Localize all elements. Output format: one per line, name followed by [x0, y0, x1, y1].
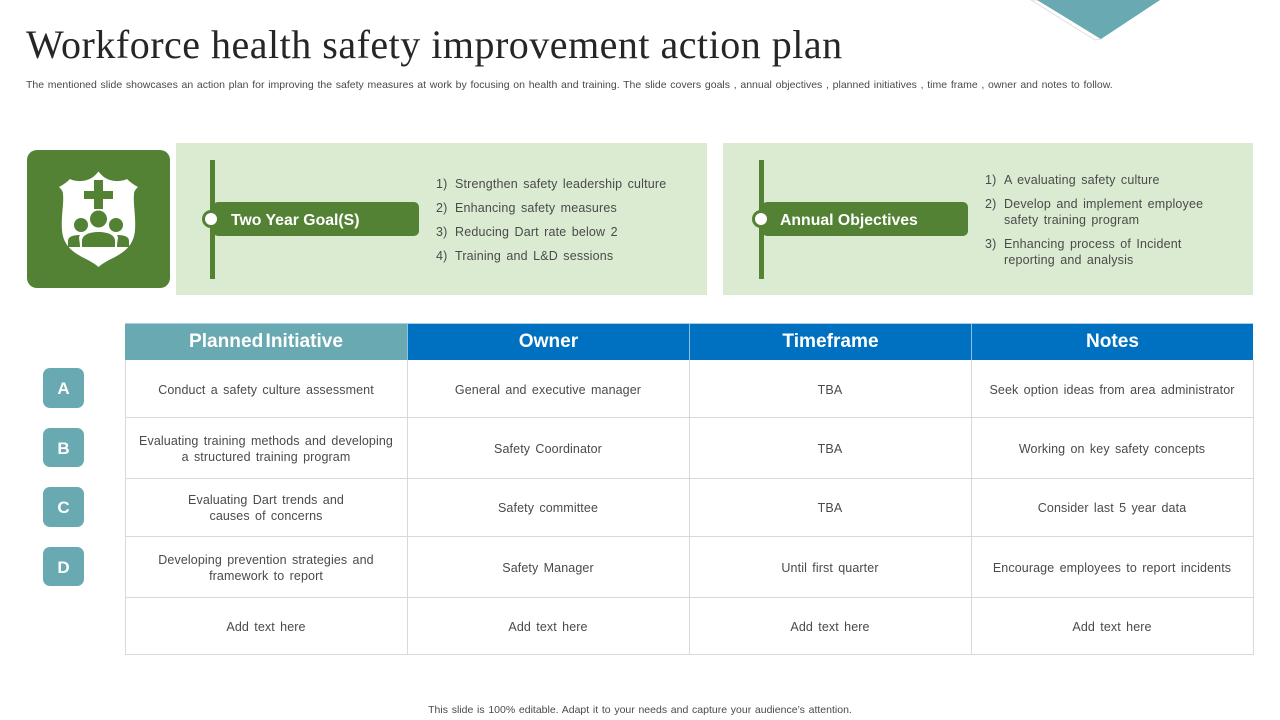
- connector dot: objectives: [752, 210, 770, 228]
- row B cells: [139, 434, 1205, 464]
- row C cells: Evaluating Dart trends and: [188, 493, 344, 507]
- list: two year goals: Enhancing safety measures: [455, 201, 617, 215]
- icon: health shield with people: [27, 150, 170, 288]
- row D cells: Safety Manager: [502, 561, 594, 575]
- list: two year goals: 3): [436, 225, 447, 239]
- panel: annual objectives: [723, 143, 1253, 295]
- row badge B: B: [57, 439, 70, 458]
- label: annual objectives: Annual Objectives: [780, 212, 918, 229]
- list: annual objectives: [985, 173, 1203, 267]
- header: owner: [408, 323, 689, 360]
- list: annual objectives: safety training program: [1004, 213, 1139, 227]
- row A cells: TBA: [818, 383, 842, 397]
- row A cells: [158, 383, 1235, 397]
- row D cells: [158, 553, 1231, 583]
- row badge D: [43, 547, 84, 586]
- row D cells: Until first quarter: [781, 561, 879, 575]
- vertical connector: objectives: [759, 160, 764, 279]
- row A cells: Seek option ideas from area administrator: [989, 383, 1235, 397]
- footer note: This slide is 100% editable. Adapt it to your needs and capture your audience’s attention.: [428, 704, 852, 716]
- header: owner: Owner: [519, 331, 578, 352]
- header: notes: [972, 323, 1253, 360]
- row A cells: General and executive manager: [455, 383, 641, 397]
- label: annual objectives: [762, 202, 968, 236]
- row C cells: TBA: [818, 501, 842, 515]
- row E cells: Add text here: [790, 620, 870, 634]
- subtitle: The mentioned slide showcases an action plan for improving the safety measures at work by focusing on health and training. The slide covers goals , annual objectives , planned initiatives , time frame , owner and notes to follow.: [26, 79, 1113, 91]
- connector dot: goals: [202, 210, 220, 228]
- row B cells: Safety Coordinator: [494, 442, 602, 456]
- row C cells: Consider last 5 year data: [1038, 501, 1186, 515]
- list: two year goals: Strengthen safety leadership culture: [455, 177, 666, 191]
- row B cells: a structured training program: [182, 450, 350, 464]
- header: timeframe: Timeframe: [782, 331, 879, 352]
- list: two year goals: 2): [436, 201, 447, 215]
- label: two year goals: [213, 202, 419, 236]
- header: planned initiative: Planned Initiative: [189, 331, 343, 352]
- row B cells: Evaluating training methods and developing: [139, 434, 393, 448]
- row badge B: [43, 428, 84, 467]
- list: annual objectives: 2): [985, 197, 996, 211]
- list: two year goals: [436, 177, 666, 263]
- row D cells: Encourage employees to report incidents: [993, 561, 1231, 575]
- list: two year goals: 4): [436, 249, 447, 263]
- header: notes: Notes: [1086, 331, 1139, 352]
- list: annual objectives: Develop and implement employee: [1004, 197, 1203, 211]
- row badge C: [43, 487, 84, 527]
- list: annual objectives: reporting and analysis: [1004, 253, 1133, 267]
- vertical connector: goals: [210, 160, 215, 279]
- list: two year goals: Training and L&D sessions: [455, 249, 613, 263]
- decorative corner triangle: [1030, 0, 1160, 40]
- row badge D: D: [57, 558, 70, 577]
- row C cells: [188, 493, 1186, 523]
- header: planned initiative: [125, 323, 407, 360]
- row B cells: TBA: [818, 442, 842, 456]
- row E cells: Add text here: [226, 620, 306, 634]
- label: two year goals: Two Year Goal(S): [231, 212, 359, 229]
- row badge C: C: [57, 498, 70, 517]
- row A cells: Conduct a safety culture assessment: [158, 383, 374, 397]
- row B cells: Working on key safety concepts: [1019, 442, 1205, 456]
- header: timeframe: [690, 323, 971, 360]
- row badge A: [43, 368, 84, 408]
- panel: two year goals: [176, 143, 707, 295]
- list: annual objectives: A evaluating safety culture: [1004, 173, 1160, 187]
- row D cells: framework to report: [209, 569, 323, 583]
- row E cells: [226, 620, 1152, 634]
- row C cells: Safety committee: [498, 501, 598, 515]
- list: annual objectives: 3): [985, 237, 996, 251]
- row E cells: Add text here: [508, 620, 588, 634]
- list: annual objectives: Enhancing process of Incident: [1004, 237, 1182, 251]
- row D cells: Developing prevention strategies and: [158, 553, 374, 567]
- list: two year goals: Reducing Dart rate below 2: [455, 225, 618, 239]
- list: two year goals: 1): [436, 177, 447, 191]
- row E cells: Add text here: [1072, 620, 1152, 634]
- list: annual objectives: 1): [985, 173, 996, 187]
- row badge A: A: [57, 379, 70, 398]
- title: Workforce health safety improvement action plan: [26, 22, 843, 67]
- row C cells: causes of concerns: [209, 509, 323, 523]
